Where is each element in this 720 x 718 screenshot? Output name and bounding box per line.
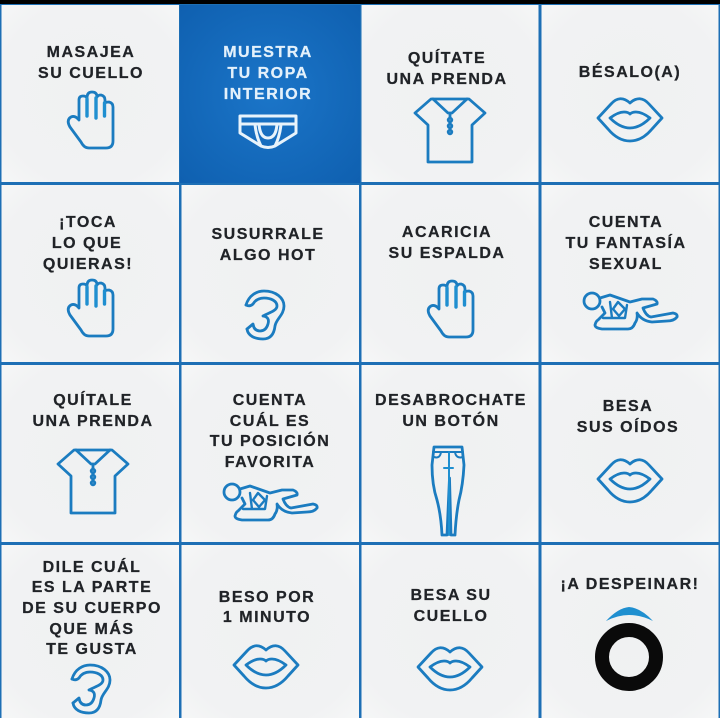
text: masajea su cuello: MASAJEA	[47, 44, 135, 61]
text: dile cual es la parte de su cuerpo que mas te gusta: DE SU CUERPO	[22, 600, 162, 617]
panel: beso por 1 minuto	[182, 545, 359, 718]
text: beso por 1 minuto: BESO POR	[219, 589, 315, 606]
text: quitate una prenda	[386, 48, 508, 88]
text: desabrochate un boton	[375, 392, 527, 430]
text: acaricia su espalda: ACARICIA	[402, 224, 492, 241]
panel: muestra tu ropa interior	[180, 5, 360, 183]
text: masajea su cuello: SU CUELLO	[38, 65, 144, 82]
text: quitale una prenda: UNA PRENDA	[32, 413, 154, 430]
icon: lips	[418, 648, 482, 690]
icon: shirt	[415, 99, 485, 162]
panel: desabrochate un boton	[362, 365, 538, 542]
logo: black ring	[602, 630, 656, 684]
text: toca lo que quieras	[43, 214, 133, 273]
panel: susurrale algo hot	[182, 185, 359, 362]
text: cuenta tu posicion favorita: FAVORITA	[225, 454, 315, 471]
text: cuenta tu posicion favorita	[210, 392, 330, 471]
panel: quitate una prenda	[362, 5, 538, 182]
text: besa sus oidos	[577, 398, 679, 436]
text: susurrale algo hot	[211, 226, 325, 264]
logo: blue arc	[606, 607, 653, 621]
panel: besalo	[542, 5, 718, 182]
text: cuenta tu fantasia sexual: CUENTA	[589, 214, 663, 231]
icon: reclining figure	[584, 293, 677, 329]
text: muestra tu ropa interior: MUESTRA	[223, 44, 313, 61]
text: cuenta tu posicion favorita: CUENTA	[233, 392, 307, 409]
icon: reclining figure	[224, 484, 317, 520]
text: cuenta tu fantasia sexual	[565, 214, 687, 273]
text: dile cual es la parte de su cuerpo que mas te gusta	[22, 557, 162, 658]
panel: dile cual es la parte	[2, 545, 179, 718]
text: dile cual es la parte de su cuerpo que mas te gusta: ES LA PARTE	[32, 579, 152, 596]
text: susurrale algo hot: SUSURRALE	[211, 226, 325, 243]
text: besa sus oidos: BESA	[603, 398, 653, 415]
text: toca lo que quieras: QUIERAS!	[43, 256, 133, 273]
icon: ear	[72, 665, 110, 713]
text: acaricia su espalda: SU ESPALDA	[389, 245, 505, 262]
text: toca lo que quieras: LO QUE	[52, 235, 122, 252]
icon: lips	[234, 646, 298, 688]
panel: besa sus oidos	[542, 365, 718, 542]
text: cuenta tu posicion favorita: TU POSICIÓN	[210, 431, 330, 450]
text: quitale una prenda: QUÍTALE	[53, 390, 133, 409]
text: toca lo que quieras: ¡TOCA	[59, 214, 117, 231]
text: susurrale algo hot: ALGO HOT	[220, 247, 316, 264]
text: desabrochate un boton: UN BOTÓN	[402, 411, 500, 430]
text: besa su cuello: BESA SU	[410, 587, 492, 604]
icon: hand	[68, 280, 113, 336]
text: besa sus oidos: SUS OÍDOS	[577, 417, 679, 436]
panel: besa su cuello	[362, 545, 538, 718]
icon: shirt	[58, 450, 128, 513]
panel: acaricia su espalda	[362, 185, 538, 362]
text: dile cual es la parte de su cuerpo que mas te gusta: DILE CUÁL	[43, 557, 141, 576]
icon: ear	[246, 291, 284, 339]
panel: cuenta tu posicion favorita	[182, 365, 359, 542]
text: beso por 1 minuto	[219, 589, 315, 626]
text: muestra tu ropa interior: TU ROPA	[227, 65, 309, 82]
text: cuenta tu fantasia sexual: TU FANTASÍA	[565, 233, 687, 252]
text: beso por 1 minuto: 1 MINUTO	[223, 609, 311, 626]
text: cuenta tu posicion favorita: CUÁL ES	[230, 411, 310, 430]
text: quitate una prenda: QUÍTATE	[408, 48, 486, 67]
icon: jeans	[432, 447, 464, 535]
panel: quitale una prenda	[2, 365, 179, 542]
text: besa su cuello	[410, 587, 492, 625]
text: besalo: BÉSALO(A)	[579, 62, 681, 81]
text: dile cual es la parte de su cuerpo que mas te gusta: TE GUSTA	[46, 641, 138, 658]
panel: masajea su cuello	[2, 5, 179, 182]
icon: lips	[598, 99, 662, 141]
text: masajea su cuello	[38, 44, 144, 82]
text: acaricia su espalda	[389, 224, 505, 262]
text: quitale una prenda	[32, 390, 154, 430]
panel: cuenta tu fantasia sexual	[542, 185, 718, 362]
text: quitate una prenda: UNA PRENDA	[386, 71, 508, 88]
top black bar	[0, 0, 720, 4]
icon: hand	[428, 281, 473, 337]
panel: a despeinar	[542, 545, 718, 718]
text: muestra tu ropa interior	[223, 44, 313, 103]
text: desabrochate un boton: DESABROCHATE	[375, 392, 527, 409]
icon: hand	[68, 92, 113, 148]
icon: briefs	[240, 116, 296, 148]
icon: lips	[598, 460, 662, 502]
text: dile cual es la parte de su cuerpo que mas te gusta: QUE MÁS	[49, 619, 135, 638]
text: besa su cuello: CUELLO	[414, 608, 488, 625]
text: cuenta tu fantasia sexual: SEXUAL	[589, 256, 663, 273]
text: muestra tu ropa interior: INTERIOR	[224, 86, 312, 103]
panel: toca lo que quieras	[2, 185, 179, 362]
text: a despeinar: ¡A DESPEINAR!	[561, 576, 699, 593]
